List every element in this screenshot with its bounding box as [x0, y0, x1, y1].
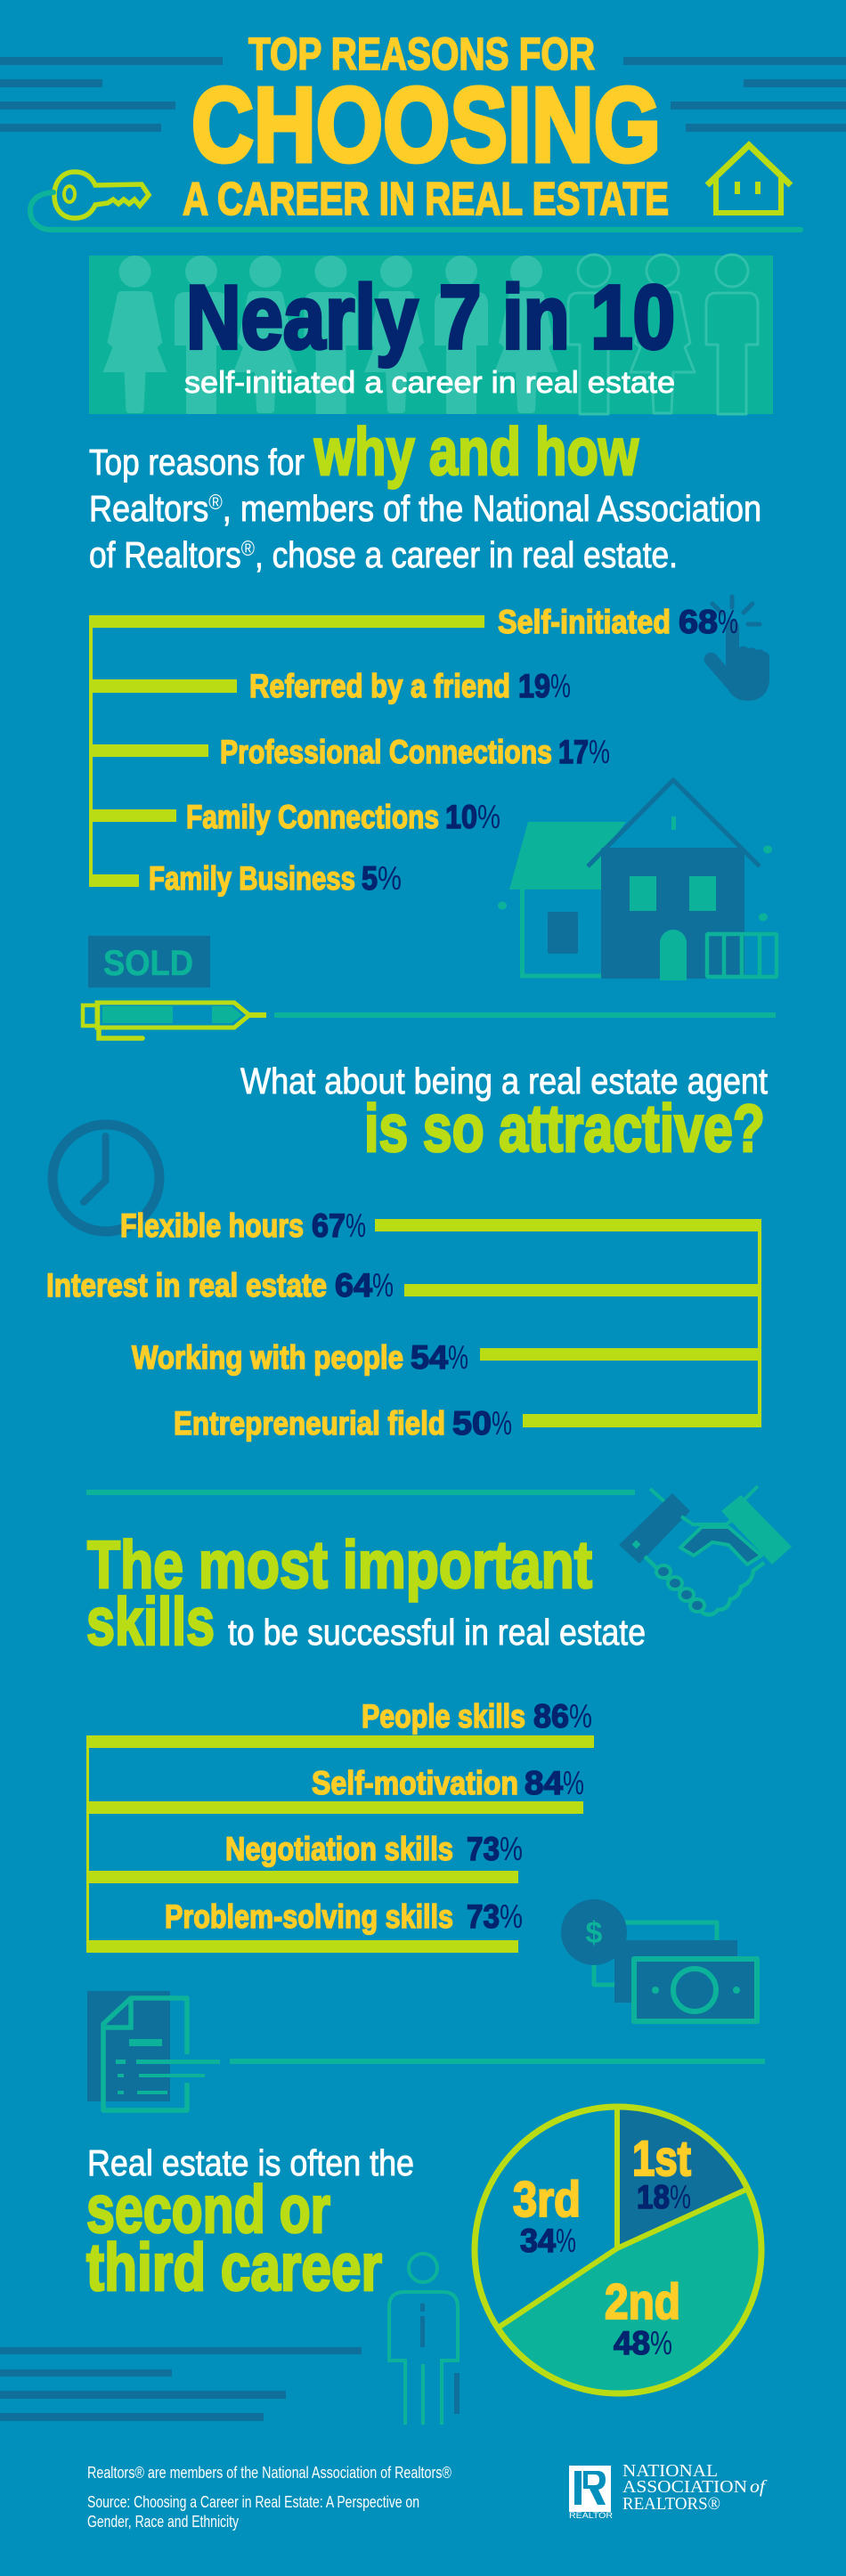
logo: national association of realtors: NATIONAL [622, 2461, 718, 2481]
title: TOP REASONS FOR [248, 28, 595, 79]
bar label: family connections: Family Connections [186, 799, 439, 835]
icon: pointing hand [704, 597, 769, 701]
logo: national association of realtors: ASSOCIATION [622, 2477, 747, 2497]
bar label: people skills: % [569, 1698, 592, 1735]
bar label: people skills: 86 [533, 1698, 569, 1735]
bar label: negotiation skills: 73 [467, 1831, 500, 1867]
bar label: interest in real estate: Interest in real estate [46, 1267, 327, 1304]
bar label: problem-solving skills: Problem-solving skills [165, 1898, 453, 1935]
bar label: self-initiated: 68 [679, 604, 718, 640]
bar label: flexible hours: % [346, 1207, 366, 1244]
pie label: 2nd: 48 [614, 2325, 650, 2361]
bar label: negotiation skills: Negotiation skills [225, 1831, 453, 1867]
bar chart: why and how [89, 604, 738, 897]
bar label: entrepreneurial field: Entrepreneurial field [174, 1405, 445, 1442]
bar label: problem-solving skills: % [500, 1898, 523, 1935]
title: CHOOSING [191, 66, 661, 184]
bar label: interest in real estate: 64 [335, 1267, 372, 1304]
icon: house outline [707, 145, 791, 213]
heading: second or third career [86, 2142, 414, 2304]
bar label: working with people: 54 [411, 1339, 448, 1376]
bar label: family connections: % [477, 799, 500, 835]
panel: nearly 7 in 10: self-initiated a career in real estate [184, 366, 675, 400]
bar label: referred by a friend: % [550, 668, 571, 704]
logo: national association of realtors: REALTOR [569, 2511, 613, 2521]
bar label: professional connections: 17 [558, 734, 589, 770]
heading: why and how: ® [208, 491, 223, 515]
heading: why and how [89, 414, 761, 575]
people row [103, 256, 558, 414]
pie label: 3rd: % [556, 2223, 576, 2259]
heading: why and how: ® [241, 537, 255, 561]
heading: is so attractive [240, 1060, 769, 1166]
bar label: interest in real estate: % [372, 1267, 394, 1304]
bar label: self-motivation: Self-motivation [312, 1765, 518, 1801]
bar label: family business: % [378, 860, 402, 897]
pie label: 2nd [605, 2273, 680, 2361]
pie label: 2nd: % [650, 2325, 672, 2361]
pie label: 1st: 1st [632, 2130, 691, 2186]
bar chart: skills [86, 1698, 594, 1953]
bar label: self-initiated: Self-initiated [498, 604, 671, 640]
title underline with key cord [30, 192, 801, 230]
logo: national association of realtors [569, 2461, 768, 2521]
icon: key [54, 172, 149, 218]
bar label: referred by a friend: 19 [518, 668, 550, 704]
pie label: 2nd: 2nd [605, 2273, 680, 2329]
panel: nearly 7 in 10 [89, 255, 773, 414]
bar label: entrepreneurial field: 50 [452, 1405, 492, 1442]
heading: most important skills: to be successful in real estate [228, 1612, 646, 1653]
icon: money: $ [586, 1916, 603, 1950]
outlined people [568, 255, 758, 414]
bar label: negotiation skills: % [500, 1831, 523, 1867]
heading: second or third career: third career [86, 2230, 382, 2304]
bar label: professional connections: % [589, 734, 610, 770]
title: A CAREER IN REAL ESTATE [183, 174, 669, 225]
pie label: 1st: 18 [637, 2179, 670, 2215]
heading: why and how: , chose a career in real estate. [255, 534, 678, 575]
heading: second or third career: Real estate is often the [87, 2142, 414, 2183]
bar label: flexible hours: 67 [312, 1207, 346, 1244]
bar label: professional connections: Professional Connections [220, 734, 552, 770]
footer source notes: Source: Choosing a Career in Real Estate: A Perspective on [87, 2493, 419, 2511]
bar label: self-motivation: % [563, 1765, 584, 1801]
bar chart: attractive [46, 1207, 761, 1442]
icon: pen [83, 1003, 266, 1038]
logo: national association of realtors: REALTORS® [622, 2494, 720, 2514]
pie label: 1st [632, 2130, 691, 2215]
heading: second or third career: second or [86, 2172, 330, 2247]
pie label: 1st: % [670, 2179, 691, 2215]
heading: most important skills: The most important [87, 1527, 592, 1602]
icon: person outline [389, 2254, 460, 2425]
icon: money [561, 1899, 757, 2021]
icon: clock [53, 1125, 159, 1231]
bar label: family business: Family Business [149, 860, 355, 897]
bar label: working with people: Working with people [132, 1339, 403, 1376]
heading: most important skills [86, 1527, 646, 1659]
bar label: problem-solving skills: 73 [467, 1898, 500, 1935]
logo: national association of realtors: of [750, 2477, 768, 2497]
bar label: working with people: % [448, 1339, 468, 1376]
footer source notes: Gender, Race and Ethnicity [87, 2513, 239, 2531]
heading: why and how: , members of the National Association [223, 488, 761, 529]
bar label: self-initiated: % [718, 604, 738, 640]
bar label: people skills: People skills [362, 1698, 525, 1735]
heading: most important skills: skills [86, 1584, 215, 1659]
heading: why and how: Top reasons for [89, 442, 305, 483]
heading: is so attractive: What about being a real estate agent [240, 1060, 769, 1101]
heading: why and how: of Realtors [89, 534, 265, 575]
bar label: flexible hours: Flexible hours [120, 1207, 304, 1244]
bar label: family connections: 10 [445, 799, 477, 835]
bar label: entrepreneurial field: % [492, 1405, 512, 1442]
pie label: 3rd [513, 2171, 581, 2259]
bar label: family business: 5 [362, 860, 378, 897]
icon: handshake [619, 1486, 792, 1614]
footer source notes [87, 2464, 451, 2531]
bar label: referred by a friend: Referred by a friend [249, 668, 510, 704]
heading: why and how: why and how [313, 414, 639, 489]
icon: sold sign: SOLD [103, 944, 193, 983]
icon: big house [498, 780, 777, 980]
icon: document [87, 1991, 220, 2110]
title [183, 28, 669, 225]
icon: sold sign [88, 936, 210, 987]
pie label: 3rd: 34 [520, 2223, 556, 2259]
pie chart: career order [475, 2106, 761, 2393]
bar label: self-motivation: 84 [525, 1765, 563, 1801]
footer source notes: Realtors® are members of the National Association of Realtors® [87, 2464, 451, 2482]
heading: why and how: Realtors [89, 488, 225, 529]
pie label: 3rd: 3rd [513, 2171, 581, 2227]
panel: nearly 7 in 10: Nearly 7 in 10 [186, 268, 675, 368]
